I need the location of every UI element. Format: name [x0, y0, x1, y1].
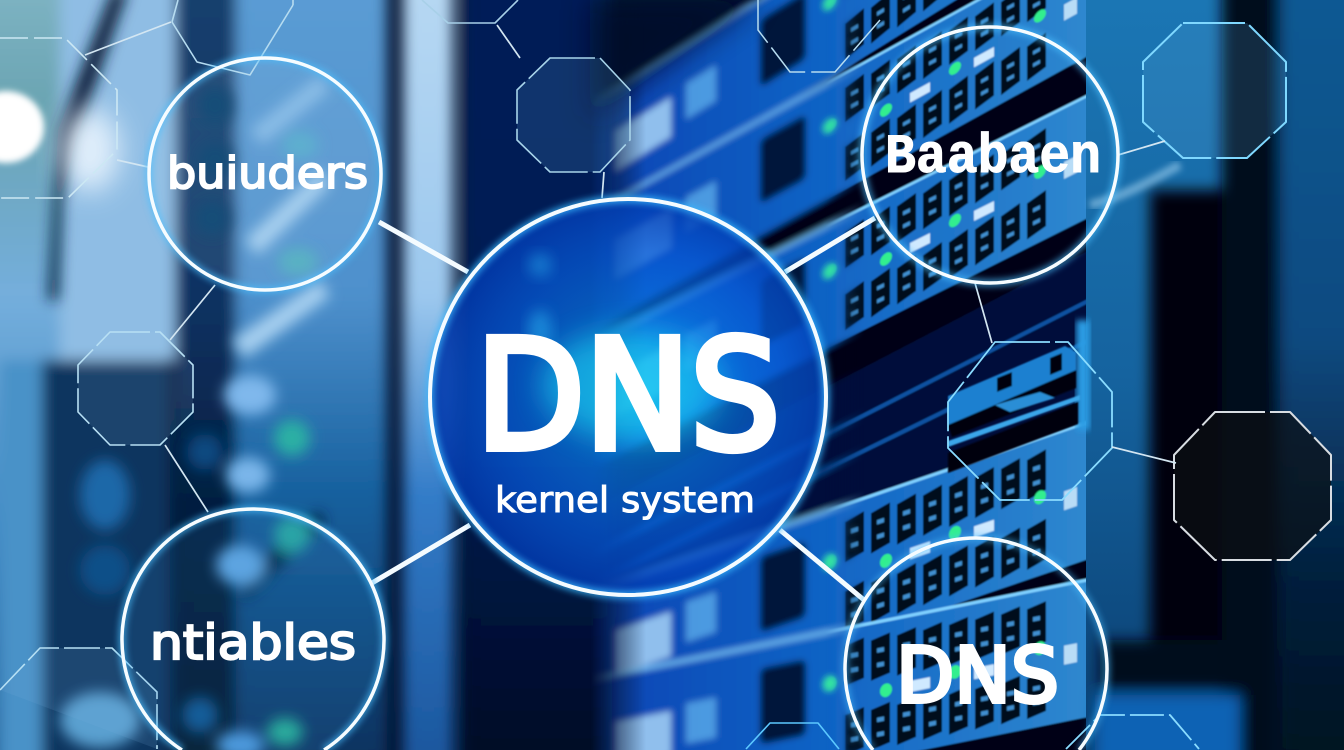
circle: top right label [862, 27, 1118, 283]
label: DNS: DNS [896, 632, 1059, 721]
octagon: top left [172, 0, 293, 75]
label: buiuders: buiuders [167, 148, 368, 199]
dark diagonal pillar [48, 0, 128, 300]
label: ntiables: ntiables [150, 615, 356, 671]
background: side cabinets on the right [1076, 0, 1344, 750]
octagon: right dark [1174, 412, 1331, 560]
label: kernel system: kernel system [495, 480, 755, 521]
octagon: bottom middle [746, 723, 839, 749]
label: Baabaen: Baabaen [885, 125, 1101, 189]
circle: buiuders [149, 58, 381, 290]
heading: DNS: DNS [476, 308, 780, 484]
background: server racks, out of focus near the hub [590, 0, 1090, 750]
circle: ntiables [122, 509, 384, 750]
octagon: bottom left [0, 648, 157, 749]
thin connectors [85, 22, 1176, 512]
network device inside octagon [948, 346, 1080, 473]
octagon: bottom right [1066, 715, 1199, 749]
octagon: top centre stubs [422, 0, 880, 72]
octagon: top right [1143, 23, 1286, 158]
circle: bottom right DNS [845, 538, 1107, 750]
circle: kernel system hub [430, 199, 826, 595]
octagon: around device [948, 342, 1112, 500]
thick connector lines [372, 218, 875, 600]
octagon: left middle [78, 332, 193, 445]
octagon: far left [0, 38, 117, 198]
octagon: centre top [517, 58, 630, 172]
